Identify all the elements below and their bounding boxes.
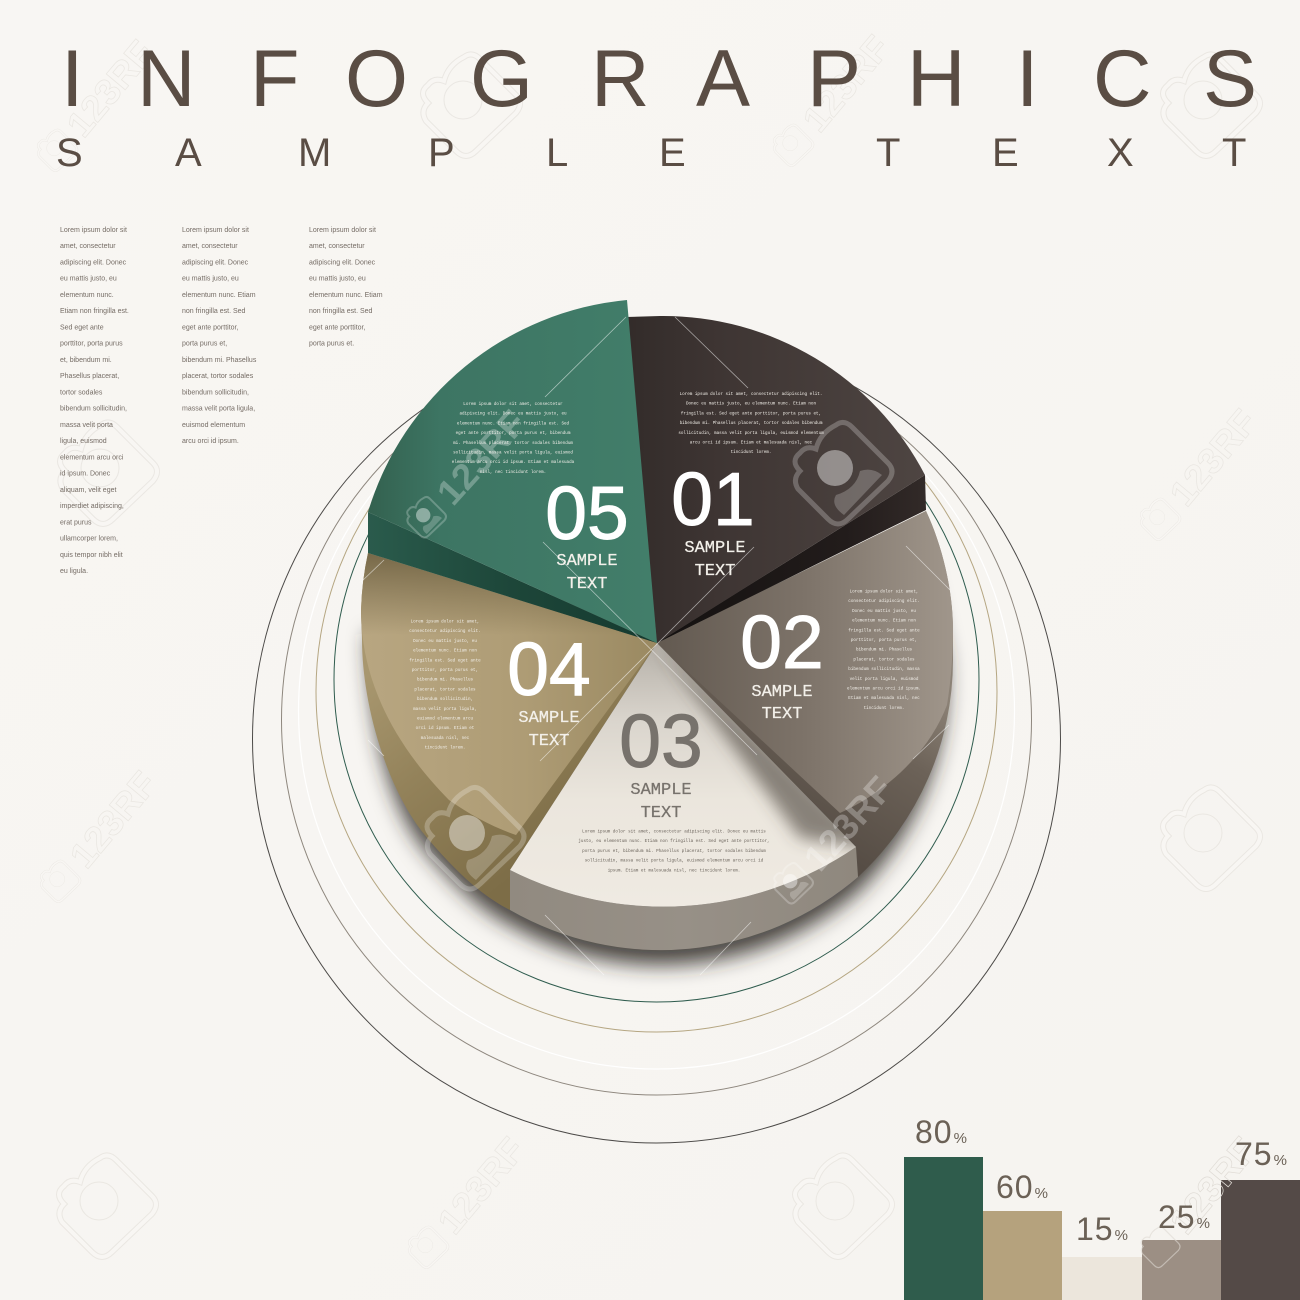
3D pie chart: [361, 300, 953, 950]
slice 03: cream: [510, 643, 880, 950]
slice 03: cream: Lorem ipsum dolor sit amet, consectetur adipiscing elit. Donec eu mattis: [582, 830, 766, 834]
text block: left column: adipiscing elit. Donec: [60, 260, 127, 266]
text block: right column: [309, 227, 383, 348]
text block: middle column: [182, 227, 257, 445]
slice 04: tan: Lorem ipsum dolor sit amet,: [411, 620, 479, 624]
slice 05: green: elementum arcu orci id ipsum. Etiam et malesuada: [452, 460, 575, 465]
slice 02: taupe: bibendum sollicitudin, massa: [848, 667, 920, 672]
watermark on green slice: [387, 397, 539, 557]
slice 02: taupe: Donec eu mattis justo, eu: [852, 609, 916, 614]
watermark top middle: 123RF: [794, 27, 898, 140]
text block: right column: non fringilla est. Sed: [309, 308, 373, 315]
slice 03: cream: porta purus et, bibendum mi. Phasellus placerat, tortor sodales bibendum: [582, 849, 766, 854]
text block: left column: elementum arcu orci: [60, 454, 124, 461]
watermark right: [1121, 396, 1270, 559]
text block: left column: porttitor, porta purus: [60, 341, 123, 348]
text block: middle column: euismod elementum: [182, 422, 245, 429]
slice 01: dark brown: Donec eu mattis justo, eu elementum nunc. Etiam non: [686, 402, 816, 407]
slice 04: tan: malesuada nisl, nec: [421, 736, 470, 741]
slice 04: tan: porttitor, porta purus et,: [412, 668, 478, 673]
slice 02: taupe: porttitor, porta purus et,: [851, 638, 917, 643]
text block: right column: eu mattis justo, eu: [309, 276, 366, 283]
watermark icon top right: [1163, 54, 1260, 156]
text block: left column: amet, consectetur: [60, 243, 116, 250]
slice 01: dark brown: TEXT: [695, 562, 735, 581]
watermark right: 123RF: [1161, 401, 1265, 514]
slice 02: taupe: 02: [740, 600, 824, 684]
slice 04: tan: consectetur adipiscing elit.: [409, 629, 481, 634]
slice 04: tan: Donec eu mattis justo, eu: [413, 639, 477, 644]
text block: left column: et, bibendum mi.: [60, 357, 112, 364]
watermark icon bottom left: [59, 1155, 156, 1257]
bar 15%: [1062, 1257, 1142, 1300]
text block: middle column: bibendum sollicitudin,: [182, 389, 249, 396]
watermark left: [21, 758, 170, 921]
text block: left column: Phasellus placerat,: [60, 373, 119, 380]
slice 05: green: SAMPLE: [556, 552, 618, 571]
watermark icon on tan slice: [427, 787, 524, 889]
slice 03: cream: justo, eu elementum nunc. Etiam non fringilla est. Sed eget ante porttitor,: [578, 839, 770, 844]
pie drop shadow: [368, 575, 946, 965]
slice 01: dark brown: bibendum mi. Phasellus placerat, tortor sodales bibendum: [680, 421, 823, 426]
slice 02: taupe: TEXT: [762, 705, 802, 724]
thin white accent lines: [361, 317, 950, 975]
watermark on cream slice: [754, 763, 906, 923]
bar 60%: [983, 1211, 1062, 1300]
text block: right column: amet, consectetur: [309, 243, 365, 250]
slice 04: tan: euismod elementum arcu: [417, 716, 474, 722]
text block: middle column: elementum nunc. Etiam: [182, 292, 256, 299]
text block: left column: Etiam non fringilla est.: [60, 308, 129, 315]
slice 04: tan: bibendum sollicitudin,: [417, 697, 473, 702]
slice 05: green: 05: [545, 471, 629, 555]
slice 01: dark brown: [626, 316, 926, 643]
text block: middle column: amet, consectetur: [182, 243, 238, 250]
slice 02: taupe: Etiam et malesuada nisl, nec: [848, 696, 920, 701]
text block: right column: adipiscing elit. Donec: [309, 260, 376, 266]
slice 05: green: [368, 300, 657, 643]
slice 04: tan: fringilla est. Sed eget ante: [409, 658, 481, 663]
slice 02: taupe: elementum arcu orci id ipsum.: [847, 686, 921, 692]
text block: left column: ullamcorper lorem,: [60, 536, 118, 543]
text block: middle column: massa velit porta ligula,: [182, 406, 255, 413]
slice 04: tan: massa velit porta ligula,: [413, 707, 477, 712]
text block: left column: aliquam, velit eget: [60, 487, 116, 494]
bar 25%: [1142, 1240, 1221, 1300]
slice 05: green: adipiscing elit. Donec eu mattis justo, eu: [459, 412, 567, 417]
slice 02: taupe: tincidunt lorem.: [864, 706, 904, 711]
slice 03: cream: sollicitudin, massa velit porta ligula, euismod elementum arcu orci id: [585, 859, 764, 864]
watermark icon right: [1163, 787, 1260, 889]
text block: middle column: Lorem ipsum dolor sit: [182, 227, 249, 234]
text block: right column: Lorem ipsum dolor sit: [309, 227, 376, 234]
text block: middle column: bibendum mi. Phasellus: [182, 357, 257, 364]
slice 02: taupe: consectetur adipiscing elit.: [848, 599, 920, 604]
text block: left column: quis tempor nibh elit: [60, 552, 123, 559]
text block: left column: imperdiet adipiscing,: [60, 503, 124, 510]
slice 04: tan: placerat, tortor sodales: [414, 687, 476, 692]
concentric rings: [252, 335, 1060, 1143]
label 60%: 60%: [996, 1169, 1048, 1205]
text block: left column: [60, 227, 129, 575]
subtitle: SAMPLE TEXT: [56, 131, 1246, 175]
text block: right column: porta purus et.: [309, 341, 354, 348]
text block: middle column: adipiscing elit. Donec: [182, 260, 249, 266]
pie watermarks: [387, 397, 906, 923]
text block: left column: Sed eget ante: [60, 324, 104, 331]
text block: left column: erat purus: [60, 519, 92, 526]
text block: right column: elementum nunc. Etiam: [309, 292, 383, 299]
slice 03: cream: SAMPLE: [630, 781, 692, 800]
slice 01: dark brown: SAMPLE: [684, 539, 746, 558]
slice 02: taupe: placerat, tortor sodales: [853, 657, 915, 662]
bar 75%: [1221, 1180, 1300, 1300]
slice 02: taupe: SAMPLE: [751, 683, 813, 702]
watermark over bars: 123RF: [1161, 1129, 1265, 1242]
title: INFOGRAPHICS: [61, 34, 1257, 124]
text block: left column: tortor sodales: [60, 389, 103, 396]
slice 02: taupe: Lorem ipsum dolor sit amet,: [850, 590, 918, 594]
text block: left column: eu ligula.: [60, 568, 88, 575]
slice 05: green: nisl, nec tincidunt lorem.: [480, 470, 546, 475]
slice 05: green: sollicitudin, massa velit porta ligula, euismod: [453, 450, 573, 456]
slice 04: tan: tincidunt lorem.: [425, 746, 465, 751]
slice 02: taupe: [657, 511, 953, 877]
text block: left column: elementum nunc.: [60, 292, 114, 299]
slice 02: taupe: elementum nunc. Etiam non: [852, 619, 916, 624]
slice 05: green: TEXT: [567, 575, 607, 594]
watermark top left: [18, 27, 167, 190]
slice 01: dark brown: fringilla est. Sed eget ante porttitor, porta purus et,: [681, 411, 821, 416]
label 80%: 80%: [915, 1114, 967, 1150]
slice 01: dark brown: tincidunt lorem.: [731, 450, 771, 455]
watermark left: 123RF: [61, 763, 165, 876]
slice 02: taupe: bibendum mi. Phasellus: [856, 648, 913, 653]
label 25%: 25%: [1158, 1199, 1210, 1235]
slice 02: taupe: fringilla est. Sed eget ante: [848, 628, 920, 633]
slice 04: tan: [361, 553, 657, 910]
text block: left column: eu mattis justo, eu: [60, 276, 117, 283]
slice 04: tan: bibendum mi. Phasellus: [417, 678, 474, 683]
slice 05: green: mi. Phasellus placerat, tortor sodales bibendum: [453, 441, 573, 446]
watermark bottom centre: 123RF: [429, 1129, 533, 1242]
bar 80%: [904, 1157, 983, 1300]
slice 04: tan: orci id ipsum. Etiam et: [416, 726, 475, 731]
watermark top middle: [754, 22, 903, 185]
text block: middle column: placerat, tortor sodales: [182, 373, 254, 380]
slice 01: dark brown: arcu orci id ipsum. Etiam et malesuada nisl, nec: [690, 440, 813, 446]
slice 04: tan: TEXT: [529, 732, 569, 751]
slice 04: tan: elementum nunc. Etiam non: [413, 649, 477, 654]
text block: left column: ligula, euismod: [60, 438, 107, 445]
text block: right column: eget ante porttitor,: [309, 324, 365, 331]
slice 05: green: elementum nunc. Etiam non fringilla est. Sed: [457, 421, 570, 426]
watermark over bars: [1121, 1124, 1270, 1287]
slice 03: cream: ipsum. Etiam et malesuada nisl, nec tincidunt lorem.: [608, 868, 740, 873]
watermark on green slice: 123RF: [429, 402, 534, 513]
watermark icon top centre: [423, 54, 520, 156]
slice 03: cream: 03: [619, 699, 703, 783]
slice 05: green: eget ante porttitor, porta purus et, bibendum: [456, 431, 571, 436]
text block: left column: id ipsum. Donec: [60, 471, 111, 478]
slice 01: dark brown: 01: [671, 457, 755, 541]
slice 03: cream: TEXT: [641, 804, 681, 823]
text block: left column: Lorem ipsum dolor sit: [60, 227, 127, 234]
slice 04: tan: SAMPLE: [518, 709, 580, 728]
slice 05: green: Lorem ipsum dolor sit amet, consectetur: [463, 402, 563, 407]
watermark icon on dark slice: [795, 422, 892, 524]
label 15%: 15%: [1076, 1211, 1128, 1247]
text block: middle column: porta purus et,: [182, 341, 227, 348]
watermark icon bottom centre: [795, 1155, 892, 1257]
text block: middle column: eget ante porttitor,: [182, 324, 238, 331]
text block: middle column: eu mattis justo, eu: [182, 276, 239, 283]
bar chart: [904, 1114, 1300, 1300]
slice 01: dark brown: Lorem ipsum dolor sit amet, consectetur adipiscing elit.: [680, 392, 822, 397]
slice 02: taupe: velit porta ligula, euismod: [850, 677, 919, 682]
label 75%: 75%: [1235, 1136, 1287, 1172]
watermark on cream slice: 123RF: [796, 768, 901, 879]
watermark icon left: [60, 422, 157, 524]
slice 04: tan: 04: [507, 627, 591, 711]
slice 01: dark brown: sollicitudin, massa velit porta ligula, euismod elementum: [678, 431, 824, 436]
watermark bottom centre: [389, 1124, 538, 1287]
text block: middle column: non fringilla est. Sed: [182, 308, 246, 315]
text block: left column: massa velit porta: [60, 422, 113, 429]
text block: left column: bibendum sollicitudin,: [60, 406, 127, 413]
watermark top left: 123RF: [58, 32, 162, 145]
text block: middle column: arcu orci id ipsum.: [182, 438, 239, 445]
